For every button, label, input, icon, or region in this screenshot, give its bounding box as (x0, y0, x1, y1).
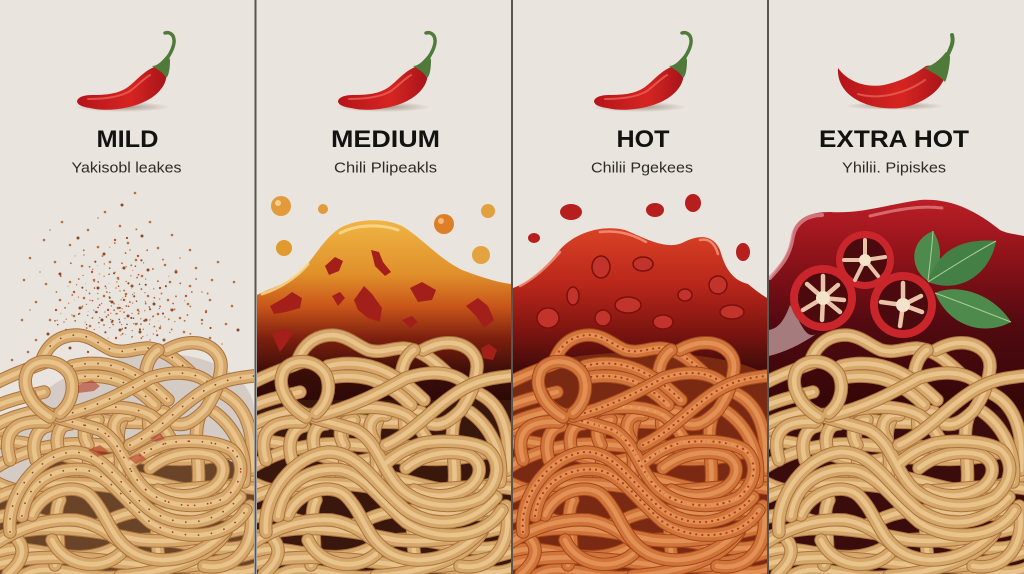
subtitle: hot: Chilii Pgekees (591, 160, 693, 176)
panel dividers (254, 0, 769, 574)
title: medium: MEDIUM (331, 126, 440, 153)
sauce droplets (271, 196, 495, 264)
noodles: mild (0, 335, 262, 574)
glossy highlights (770, 215, 822, 278)
dark red sauce (769, 200, 1024, 420)
subtitle: mild: Yakisobl leakes (72, 160, 182, 176)
title: extra hot: EXTRA HOT (819, 126, 969, 153)
subtitle: medium: Chili Plipeakls (334, 160, 437, 176)
noodles: medium (248, 335, 518, 574)
chili ring 2 (790, 265, 856, 331)
chili icon: extra hot (838, 35, 953, 110)
panel: hot (505, 194, 775, 574)
chili ring 3 (870, 272, 936, 338)
chili icon: mild (74, 33, 174, 112)
panel: medium (248, 196, 518, 574)
chili flake spray (12, 193, 238, 368)
shadow behind mild noodles (0, 355, 254, 483)
red droplets (528, 194, 750, 261)
chili icon: hot (591, 33, 691, 112)
title: mild: MILD (96, 126, 158, 153)
dark base (769, 410, 1024, 574)
chili flakes in sauce (270, 250, 497, 360)
noodles: hot (505, 335, 775, 574)
chili icon: medium (335, 33, 435, 112)
leaf 2 (928, 240, 996, 286)
chili ring 1 (836, 231, 894, 289)
noodles: extra hot (761, 335, 1024, 574)
chili chunks in sauce (537, 256, 744, 329)
amber sauce (257, 220, 511, 420)
pooled sheen (769, 305, 816, 356)
panel: mild (0, 193, 262, 574)
panel: extra hot (761, 200, 1024, 574)
spice dust band (513, 352, 767, 574)
sauce highlight (262, 226, 398, 294)
dark base (257, 400, 511, 574)
subtitle: extra hot: Yhilii. Pipiskes (842, 160, 946, 176)
red chili patches on noodles (78, 380, 165, 464)
dark base (0, 441, 254, 574)
leaf 1 (914, 231, 940, 281)
title: hot: HOT (616, 126, 670, 153)
leaf 3 (935, 289, 1011, 329)
sauce highlight (520, 231, 718, 286)
red sauce (513, 228, 767, 374)
